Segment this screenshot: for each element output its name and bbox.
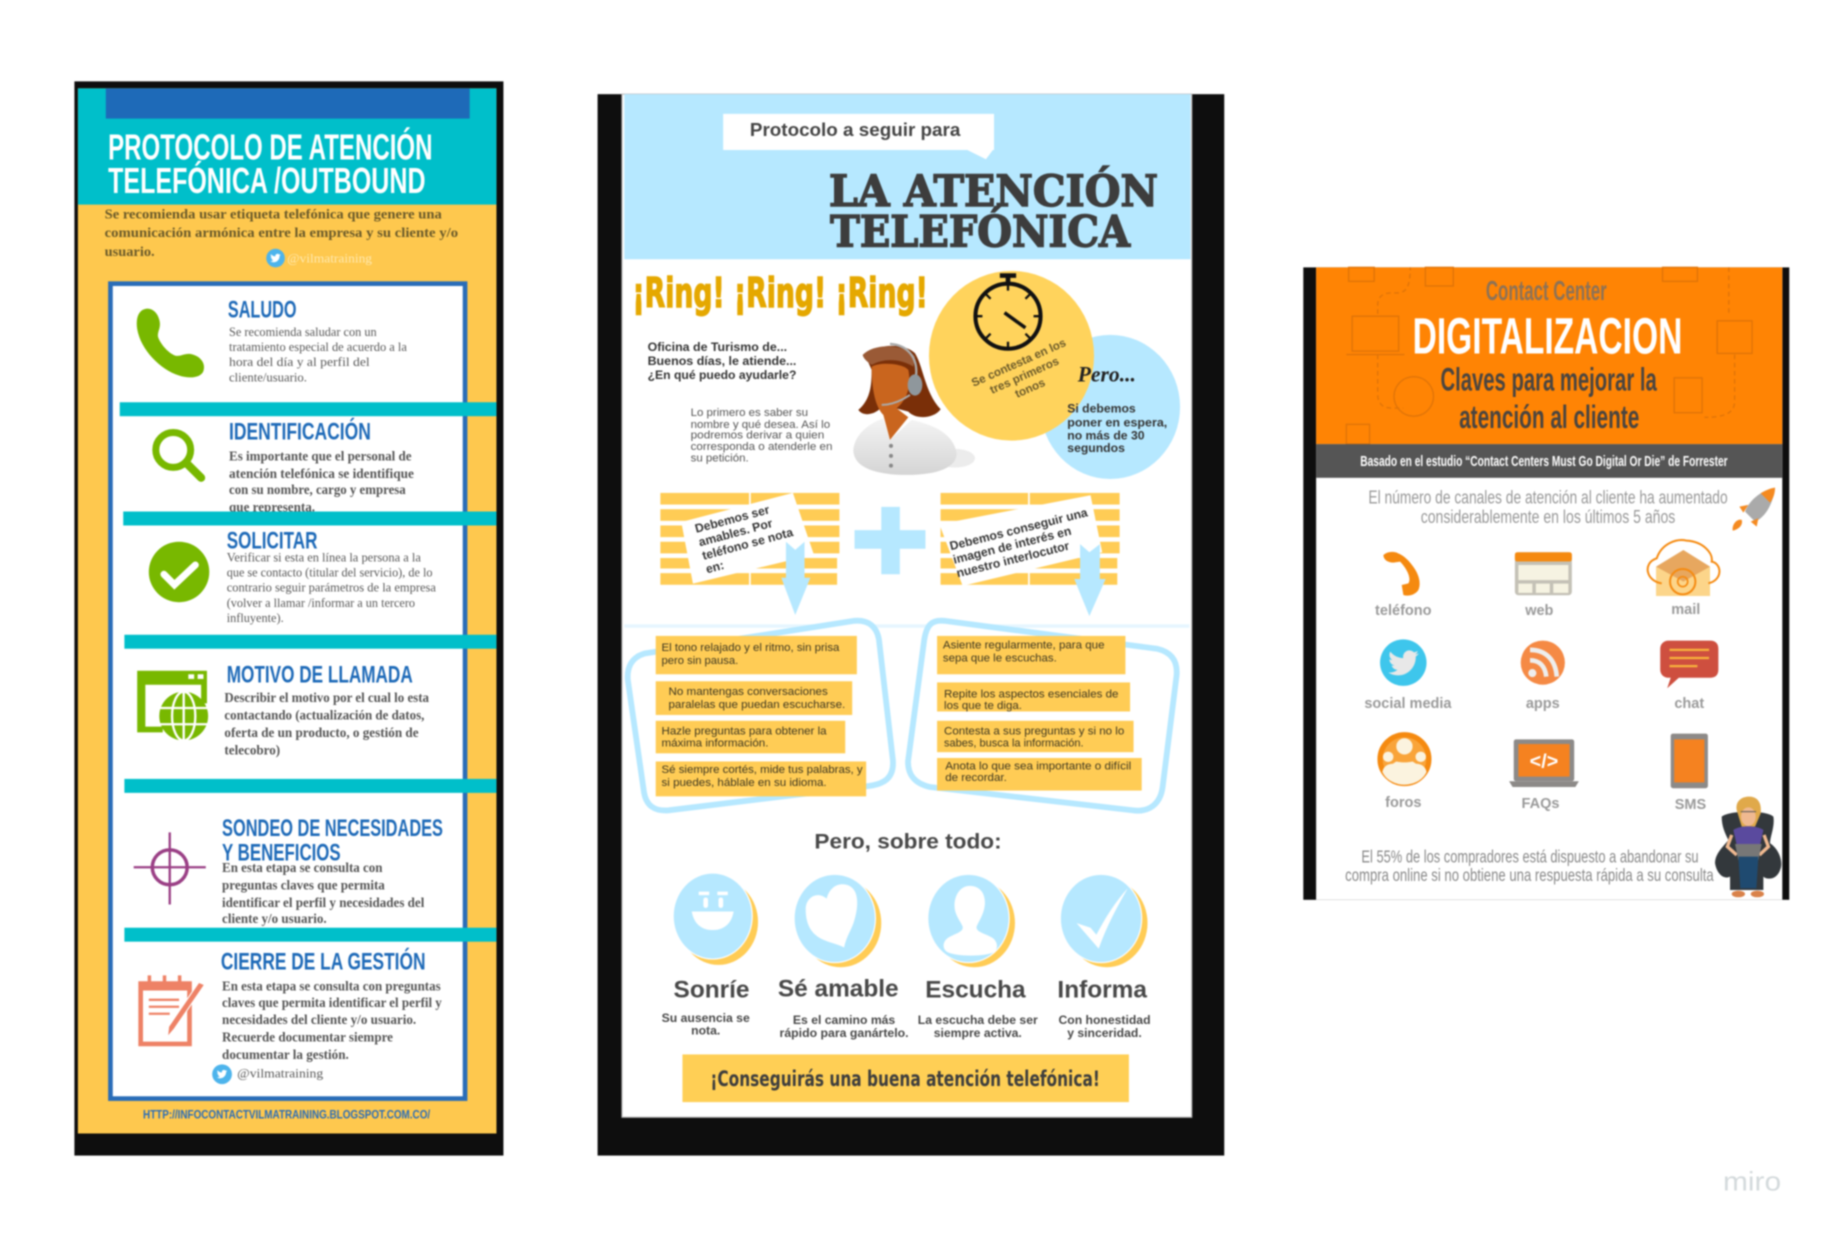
twitter handle: @vilmatraining — [287, 252, 372, 266]
text: si debemos: segundos — [1067, 441, 1125, 455]
subtitle: atención al cliente — [1459, 399, 1639, 435]
panel: la atencion telefonica — [598, 94, 1224, 1156]
yellow bubble: tres tonos: tres primeros — [988, 355, 1061, 397]
left note block: amables. Por — [697, 516, 774, 549]
twitter handle bottom: @vilmatraining — [237, 1067, 323, 1081]
list frame: right — [908, 621, 1177, 811]
closing text: compra online si no obtiene una respuesta rápida a su consulta — [1345, 865, 1714, 885]
text: first step: corresponda o atenderle en — [691, 441, 832, 453]
intro text: comunicación armónica entre la empresa y su cliente y/o — [105, 225, 458, 240]
icon: smile — [673, 873, 758, 965]
text: first step: podremos derivar a quien — [691, 429, 824, 441]
intro text: considerablemente en los últimos 5 años — [1421, 506, 1675, 527]
twitter handle — [266, 249, 372, 267]
step: cierre: Recuerde documentar siempre — [222, 1030, 393, 1045]
list item — [656, 636, 857, 674]
step: sondeo: En esta etapa se consulta con — [222, 860, 383, 875]
step: sondeo: SONDEO DE NECESIDADES — [222, 815, 443, 842]
list item: los que te diga. — [944, 700, 1022, 712]
action descriptions: siempre activa. — [934, 1026, 1022, 1040]
title: LA ATENCIÓN — [829, 166, 1158, 217]
icon: person — [928, 874, 1015, 967]
step: solicitar: influyente). — [227, 611, 284, 625]
action descriptions: Su ausencia se — [662, 1011, 750, 1025]
text: first step — [691, 407, 832, 465]
watermark: miro — [1723, 1166, 1781, 1196]
icon: laptop: </> — [1530, 750, 1558, 772]
action descriptions — [662, 1011, 1151, 1040]
channel labels: teléfono — [1375, 603, 1432, 619]
list item: Hazle preguntas para obtener la — [662, 726, 828, 738]
list item: paralelas que puedan escucharse. — [669, 699, 845, 711]
label: Contact Center — [1486, 275, 1607, 306]
step: cierre: En esta etapa se consulta con preguntas — [222, 978, 441, 993]
icon: laptop — [1509, 739, 1579, 787]
heading — [108, 125, 432, 201]
step: solicitar: SOLICITAR — [227, 528, 318, 555]
text: greeting: Buenos días, le atiende... — [648, 354, 796, 368]
text: greeting: Oficina de Turismo de... — [648, 340, 787, 354]
step: motivo de llamada: MOTIVO DE LLAMADA — [227, 661, 413, 688]
icon: magnifier — [156, 432, 201, 478]
action labels: Sonríe — [674, 976, 750, 1003]
icon: forums — [1380, 735, 1429, 785]
speech bubble — [723, 114, 994, 159]
closing text: El 55% de los compradores está dispuesto a abandonar su — [1361, 847, 1699, 867]
right note block — [939, 491, 1120, 587]
step: motivo de llamada — [137, 661, 429, 757]
text: si debemos: Si debemos — [1067, 402, 1136, 416]
left note block: en: — [704, 558, 726, 576]
plus sign — [855, 507, 925, 574]
icon: web globe — [137, 671, 208, 741]
list item — [656, 681, 852, 715]
source band — [1316, 444, 1782, 478]
intro text — [105, 207, 458, 259]
step: saludo: SALUDO — [228, 296, 296, 323]
step: identificacion — [156, 417, 414, 515]
step: identificacion: atención telefónica se identifique — [229, 466, 414, 481]
action descriptions: La escucha debe ser — [918, 1013, 1038, 1027]
icon: check — [1060, 874, 1148, 967]
action descriptions: y sinceridad. — [1067, 1026, 1142, 1040]
list item — [656, 721, 845, 753]
icon: check — [149, 542, 209, 602]
icon: call center agent — [853, 344, 975, 475]
step: saludo: Se recomienda saludar con un — [229, 325, 377, 339]
list frame: left — [628, 621, 893, 810]
list item — [937, 721, 1134, 752]
step: sondeo: cliente y/o usuario. — [222, 911, 327, 926]
teal dividers — [120, 402, 496, 942]
step: cierre: necesidades del cliente y/o usuario. — [222, 1012, 416, 1027]
step: motivo de llamada: telecobro) — [224, 742, 280, 757]
list item: Anota lo que sea importante o difícil — [945, 761, 1131, 773]
step: identificacion: Es importante que el personal de — [229, 448, 412, 463]
text: si debemos: poner en espera, — [1067, 416, 1167, 430]
title — [829, 166, 1158, 257]
icon: stopwatch — [975, 276, 1041, 349]
right note block: imagen de interés en — [952, 524, 1073, 567]
icon: mail — [1648, 540, 1719, 596]
step: saludo: hora del día y al perfil del — [229, 355, 370, 369]
step: sondeo — [134, 815, 443, 926]
white content box — [110, 284, 465, 1099]
list item: de recordar. — [945, 772, 1007, 784]
text: si debemos: no más de 30 — [1067, 428, 1145, 442]
left note block — [660, 491, 839, 587]
panel: digitalizacion — [1303, 267, 1789, 900]
blue bubble — [1041, 335, 1180, 479]
list item: máxima información. — [662, 737, 768, 749]
step: sondeo: Y BENEFICIOS — [222, 839, 341, 866]
text: si debemos — [1067, 402, 1167, 455]
icon: phone — [137, 309, 204, 377]
channel labels: foros — [1385, 795, 1421, 811]
closing text — [1345, 847, 1714, 885]
list item: Contesta a sus preguntas y si no lo — [944, 726, 1124, 738]
step: identificacion: que representa. — [229, 500, 315, 515]
arrow: right — [1074, 544, 1106, 616]
channel labels: social media — [1364, 696, 1452, 712]
icon: tablet — [1671, 734, 1708, 788]
step: sondeo: preguntas claves que permita — [222, 877, 385, 892]
action descriptions: Con honestidad — [1058, 1013, 1151, 1027]
action descriptions: Es el camino más — [793, 1013, 895, 1027]
step: solicitar: Verificar si esta en línea la persona a la — [227, 551, 421, 565]
heading: TELEFÓNICA /OUTBOUND — [108, 159, 426, 201]
icon: person in armchair — [1715, 797, 1781, 897]
action labels: Informa — [1057, 976, 1147, 1003]
list item: si puedes, háblale en su idioma. — [662, 777, 827, 789]
panel: protocolo outbound — [74, 81, 503, 1156]
icon: chat — [1660, 641, 1718, 688]
speech bubble: Protocolo a seguir para — [750, 119, 961, 140]
step: saludo — [137, 296, 408, 384]
intro text: Se recomienda usar etiqueta telefónica que genere una — [105, 207, 442, 222]
arrow: left — [781, 542, 810, 615]
text: first step: Lo primero es saber su — [691, 407, 808, 419]
step: identificacion: IDENTIFICACIÓN — [229, 417, 371, 445]
icon: twitter — [1380, 639, 1427, 686]
list item: sabes, busca la información. — [944, 737, 1084, 749]
channel labels: SMS — [1675, 797, 1707, 813]
action labels — [674, 975, 1147, 1003]
action descriptions: rápido para ganártelo. — [780, 1026, 909, 1040]
source url: HTTP://INFOCONTACTVILMATRAINING.BLOGSPOT.COM.CO/ — [143, 1108, 431, 1121]
step: motivo de llamada: Describir el motivo por el cual lo esta — [224, 690, 429, 705]
list item: Repite los aspectos esenciales de — [944, 689, 1118, 701]
icon: web — [1515, 552, 1572, 595]
step: solicitar: que se contacto (titular del servicio), de lo — [227, 566, 432, 580]
list item: sepa que le escuchas. — [943, 652, 1057, 664]
step: saludo: cliente/usuario. — [229, 370, 307, 384]
heading: PROTOCOLO DE ATENCIÓN — [108, 125, 432, 167]
yellow bubble: tres tonos: Se contesta en los — [970, 336, 1068, 390]
list item: Asiente regularmente, para que — [943, 640, 1104, 652]
title: DIGITALIZACION — [1413, 307, 1682, 364]
intro text — [1368, 486, 1728, 527]
step: motivo de llamada: contactando (actualización de datos, — [224, 708, 424, 723]
action descriptions: nota. — [691, 1024, 720, 1038]
right note block: Debemos conseguir una — [948, 505, 1089, 553]
channel labels: apps — [1526, 696, 1560, 712]
subheading: Pero, sobre todo: — [814, 830, 1002, 854]
list item — [656, 761, 866, 796]
icon: heart — [794, 874, 881, 967]
action labels: Sé amable — [778, 975, 899, 1002]
channel labels: chat — [1674, 696, 1704, 712]
yellow bubble: tres tonos — [929, 271, 1094, 441]
subtitle — [1440, 362, 1657, 435]
banner: ¡Conseguirás una buena atención telefónica! — [710, 1067, 1100, 1091]
step: cierre: claves que permita identificar el perfil y — [222, 995, 442, 1010]
subtitle: Claves para mejorar la — [1440, 362, 1657, 398]
step: cierre: documentar la gestión. — [222, 1047, 349, 1062]
list item: pero sin pausa. — [662, 655, 738, 667]
step: solicitar: (volver a llamar /informar a un tercero — [227, 596, 415, 610]
twitter handle bottom — [212, 1064, 323, 1084]
step: cierre — [141, 948, 442, 1062]
list item — [937, 682, 1130, 712]
icon: notepad — [141, 975, 205, 1044]
title: TELEFÓNICA — [830, 206, 1131, 257]
icon: crosshair — [134, 832, 206, 904]
list item: El tono relajado y el ritmo, sin prisa — [662, 642, 840, 654]
step: sondeo: identificar el perfil y necesidades del — [222, 895, 425, 910]
list item: Sé siempre cortés, mide tus palabras, y — [662, 764, 863, 776]
text: greeting — [648, 340, 796, 382]
step: saludo: tratamiento especial de acuerdo a la — [229, 340, 408, 354]
channel labels: mail — [1671, 602, 1700, 618]
icon: rocket — [1733, 488, 1775, 531]
left note block: Debemos ser — [693, 502, 771, 536]
banner — [682, 1054, 1129, 1102]
icon: rss — [1521, 641, 1565, 685]
channel labels: web — [1524, 603, 1554, 619]
icon: phone — [1383, 552, 1420, 596]
step: solicitar — [149, 528, 437, 625]
text: greeting: ¿En qué puedo ayudarle? — [648, 368, 796, 382]
text: pero: Pero... — [1077, 361, 1136, 386]
action labels: Escucha — [925, 976, 1026, 1003]
channel labels — [1364, 602, 1707, 813]
left note block: teléfono se nota — [701, 525, 795, 563]
step: identificacion: con su nombre, cargo y empresa — [229, 482, 406, 497]
step: cierre: CIERRE DE LA GESTIÓN — [221, 948, 426, 976]
ring heading: ¡Ring! ¡Ring! ¡Ring! — [632, 269, 928, 317]
text: first step: su petición. — [691, 453, 749, 465]
list item — [937, 636, 1125, 674]
step: solicitar: contrario seguir parámetros de la empresa — [227, 581, 437, 595]
intro text: usuario. — [105, 244, 155, 259]
right note block: nuestro interlocutor — [955, 539, 1071, 580]
step: motivo de llamada: oferta de un producto, o gestión de — [224, 725, 419, 740]
list item — [937, 758, 1142, 791]
yellow bubble: tres tonos: tonos — [1013, 376, 1047, 401]
text: first step: nombre y qué desea. Así lo — [691, 419, 830, 431]
list item: No mantengas conversaciones — [669, 686, 828, 698]
channel labels: FAQs — [1522, 796, 1559, 812]
